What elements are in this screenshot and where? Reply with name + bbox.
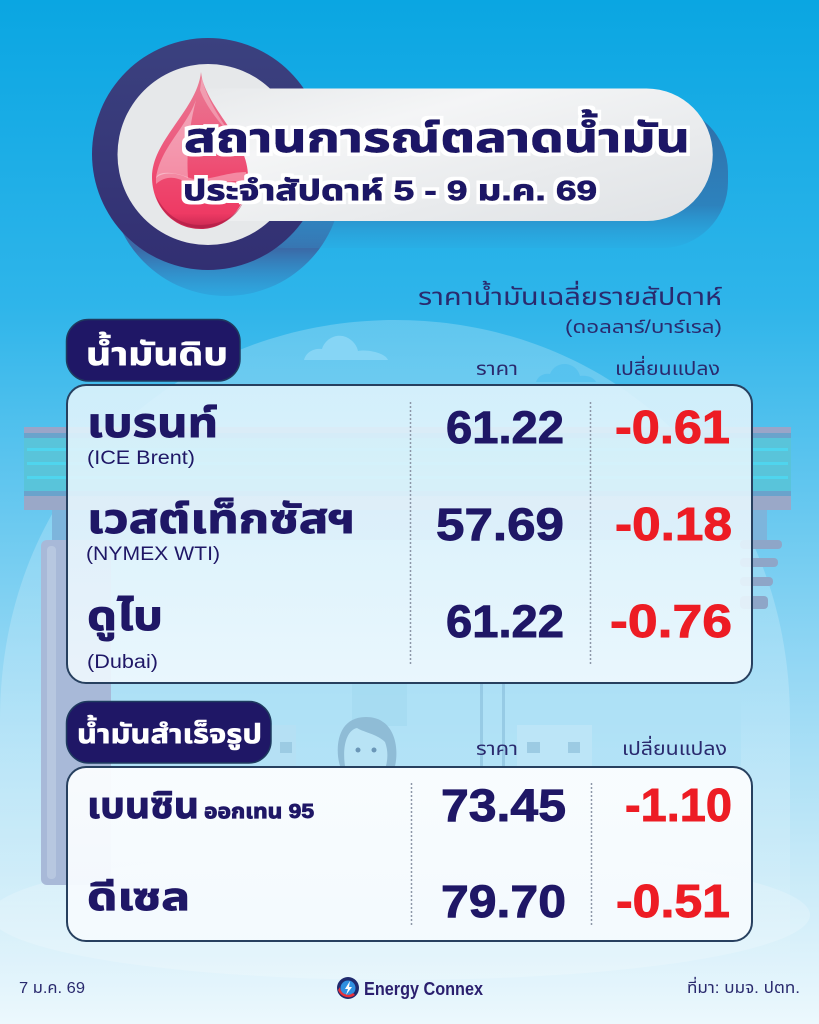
logo: Energy Connex: Energy Connex (364, 979, 483, 999)
title banner (92, 38, 728, 296)
background: attendant figure (338, 717, 396, 766)
date: 7 ม.ค. 69 (19, 980, 85, 997)
row: WTI: เวสต์เท็กซัสฯ (87, 496, 355, 542)
footer (19, 976, 800, 999)
row: diesel: ดีเซล (87, 877, 190, 919)
row: diesel: 79.70 (441, 876, 566, 927)
row: WTI: -0.18 (615, 498, 732, 550)
column header: change: เปลี่ยนแปลง (615, 355, 720, 380)
row: gasoline 95 (87, 779, 732, 831)
panel: refined products (66, 702, 752, 941)
row: diesel (87, 875, 730, 927)
tag: refined products: น้ำมันสำเร็จรูป (77, 715, 262, 750)
banner shadow (110, 64, 728, 296)
background: station canopy (24, 427, 791, 540)
row: Dubai (87, 593, 732, 673)
row: Dubai: -0.76 (610, 595, 732, 647)
row: diesel: -0.51 (616, 875, 730, 927)
row: WTI: 57.69 (436, 499, 564, 550)
row: gasoline 95: ออกเทน 95 (204, 801, 314, 823)
row: Dubai: 61.22 (446, 596, 564, 647)
column header: price: ราคา (476, 739, 518, 760)
row: gasoline 95: 73.45 (441, 780, 566, 831)
subtitle: ประจำสัปดาห์ 5 - 9 ม.ค. 69 (183, 175, 597, 206)
row: Brent: 61.22 (446, 402, 564, 453)
icon: oil drop (152, 72, 248, 229)
row: Brent: -0.61 (615, 401, 730, 453)
heading: average weekly price: ราคาน้ำมันเฉลี่ยรายสัปดาห์ (418, 280, 723, 311)
tag: crude oil: น้ำมันดิบ (86, 331, 228, 372)
banner inner circle (118, 64, 298, 245)
logo: Energy Connex (337, 977, 483, 999)
unit: dollars per barrel: (ดอลลาร์/บาร์เรล) (565, 317, 722, 337)
row: Brent (87, 400, 730, 469)
row: Brent: เบรนท์ (87, 400, 218, 446)
source: ที่มา: บมจ. ปตท. (687, 976, 800, 997)
row: gasoline 95: -1.10 (625, 779, 732, 831)
background: station wall (41, 540, 782, 885)
tag: refined products (66, 702, 271, 763)
refined table card (67, 767, 752, 941)
icon: background cloud (304, 336, 388, 360)
column header: change: เปลี่ยนแปลง (622, 735, 727, 760)
crude table card (67, 385, 752, 683)
tag: crude oil (66, 320, 240, 381)
row: gasoline 95: เบนซิน (87, 785, 199, 826)
title: สถานการณ์ตลาดน้ำมัน (184, 109, 690, 161)
row: Dubai: ดูไบ (87, 593, 163, 641)
column header: price: ราคา (476, 359, 518, 380)
panel: crude oil (66, 320, 752, 683)
banner ring (92, 38, 324, 270)
row: WTI (86, 496, 732, 565)
row: Dubai: (Dubai) (87, 652, 158, 673)
row: WTI: (NYMEX WTI) (86, 544, 220, 565)
banner pill (208, 88, 713, 221)
row: Brent: (ICE Brent) (87, 448, 195, 469)
